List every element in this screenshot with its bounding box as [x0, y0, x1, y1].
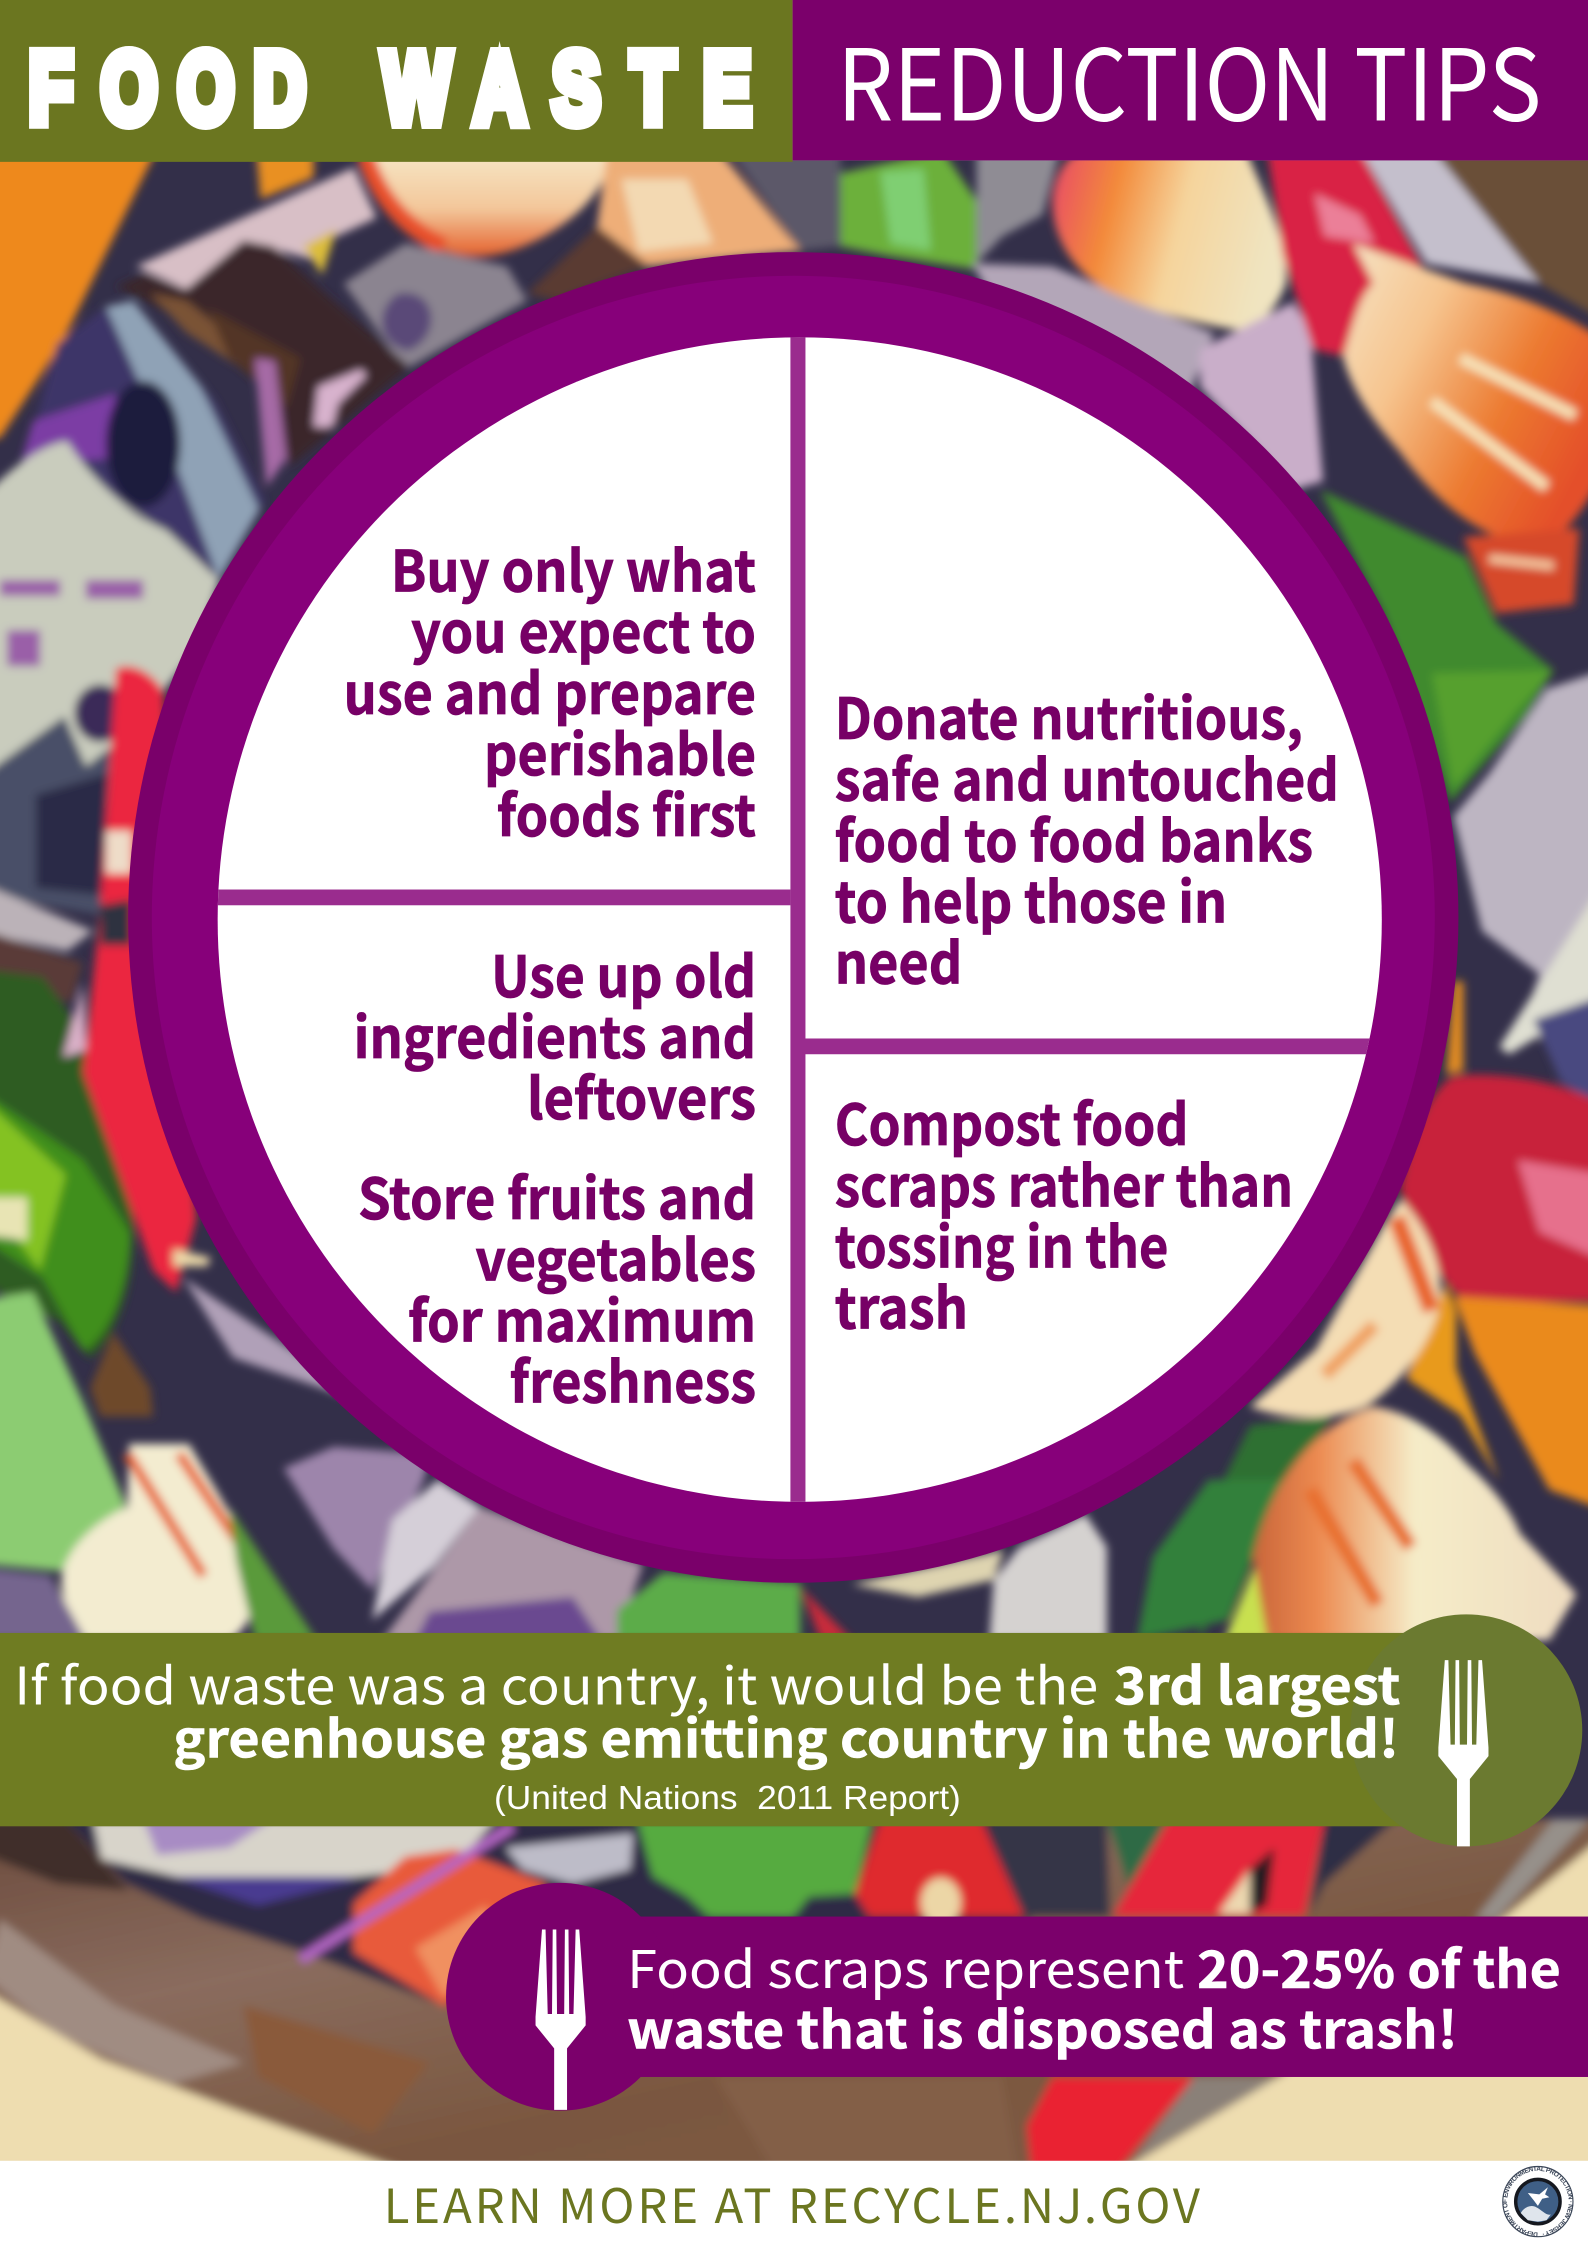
- callout: third largest emitter: [0, 1614, 1582, 1846]
- tip: use up old ingredients: ingredients and: [354, 993, 756, 1075]
- tip: store fruits and vegetables: freshness: [510, 1338, 756, 1420]
- plate: [128, 252, 1458, 1583]
- logo: NJ department of environmental protection seal: DEPARTMENT OF ENVIRONMENTAL PROTECTION · NEW JERSEY ·: [1503, 2167, 1574, 2236]
- header: reduction tips panel: [793, 0, 1588, 160]
- header: food waste panel: [0, 0, 793, 162]
- tip: buy only what you expect: foods first: [497, 771, 756, 853]
- callout text line one: If food waste was a country, it would be the: [14, 1645, 1098, 1720]
- tip: donate to food banks: [835, 674, 1339, 1000]
- source note: (United Nations 2011 Report): [494, 1779, 961, 1816]
- tip: buy only what you expect: Buy only what: [391, 527, 756, 609]
- tip: use up old ingredients: [354, 932, 756, 1136]
- tip: buy only what you expect: use and prepare: [344, 649, 756, 731]
- tip: donate to food banks: safe and untouched: [835, 735, 1339, 817]
- tip: use up old ingredients: leftovers: [527, 1054, 756, 1136]
- footer: [0, 2160, 1588, 2238]
- tip: donate to food banks: need: [835, 918, 962, 1000]
- tip: compost food scraps: trash: [835, 1264, 968, 1346]
- tip: compost food scraps: [835, 1080, 1293, 1346]
- icon: fork: [536, 1929, 586, 2110]
- callout: food scraps share: [446, 1883, 1588, 2111]
- tip: donate to food banks: food to food banks: [835, 796, 1313, 878]
- tip: compost food scraps: Compost food: [835, 1080, 1188, 1162]
- tip: compost food scraps: scraps rather than: [835, 1141, 1293, 1223]
- callout text line two: greenhouse gas emitting country in the world!: [173, 1698, 1399, 1773]
- tip: donate to food banks: to help those in: [835, 857, 1227, 939]
- icon: fork: [1438, 1660, 1488, 1846]
- callout text line one: 20-25% of the: [1197, 1928, 1561, 2003]
- tip: store fruits and vegetables: [358, 1154, 756, 1420]
- callout text line two: waste that is disposed as trash!: [627, 1988, 1458, 2063]
- tip: store fruits and vegetables: Store fruits and: [358, 1154, 756, 1236]
- tip: buy only what you expect: you expect to: [411, 588, 756, 670]
- callout text line one: [627, 1928, 1561, 2003]
- tip: store fruits and vegetables: vegetables: [475, 1216, 756, 1298]
- tip: buy only what you expect: [344, 527, 756, 853]
- callout text line one: Food scraps represent: [627, 1928, 1184, 2003]
- tip: buy only what you expect: perishable: [484, 710, 756, 792]
- tip: donate to food banks: Donate nutritious,: [835, 674, 1303, 756]
- footer link text: LEARN MORE AT RECYCLE.NJ.GOV: [384, 2168, 1201, 2237]
- tip: store fruits and vegetables: for maximum: [408, 1277, 756, 1359]
- tip: use up old ingredients: Use up old: [491, 932, 756, 1014]
- title: food waste: FOOD WASTE: [29, 32, 751, 144]
- callout text line one: 3rd largest: [1114, 1645, 1400, 1720]
- tip: compost food scraps: tossing in the: [835, 1202, 1168, 1284]
